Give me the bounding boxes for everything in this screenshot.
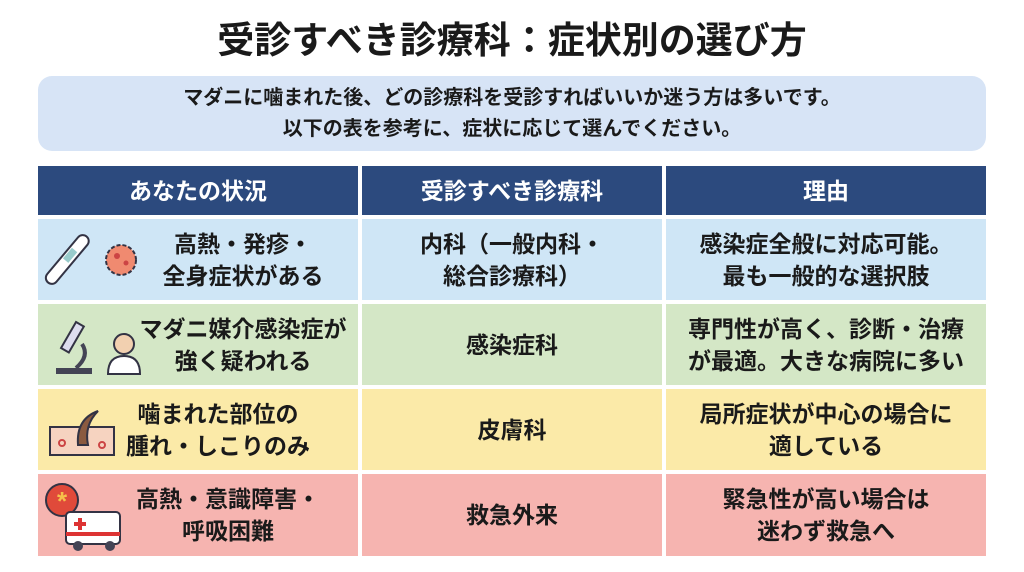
row 2 situation: マダニ媒介感染症が <box>140 316 346 342</box>
header: department: 受診すべき診療科 <box>421 178 603 204</box>
row 1 situation: 高熱・発疹・ <box>174 230 312 256</box>
row 1 department: 内科（一般内科・ <box>420 230 604 256</box>
header: situation <box>38 166 358 215</box>
row 2 situation <box>38 304 358 385</box>
row 3 situation: 噛まれた部位の <box>138 400 298 426</box>
header: department <box>362 166 662 215</box>
row 1 situation: 全身症状がある <box>162 262 324 288</box>
icon: microscope and doctor <box>56 320 141 375</box>
row 4 department: 救急外来 <box>466 502 558 528</box>
row 1 reason <box>666 219 986 300</box>
intro box: 以下の表を参考に、症状に応じて選んでください。 <box>283 118 741 140</box>
row 4 reason: 緊急性が高い場合は <box>722 486 930 512</box>
icon: skin bite <box>49 410 115 456</box>
intro box: マダニに噛まれた後、どの診療科を受診すればいいか迷う方は多いです。 <box>183 86 841 108</box>
row 3 reason: 局所症状が中心の場合に <box>700 400 952 426</box>
row 4 reason <box>666 474 986 556</box>
row 2 reason <box>666 304 986 385</box>
row 4 department <box>362 474 662 556</box>
row 2 reason: が最適。大きな病院に多い <box>688 348 964 374</box>
row 1 reason: 最も一般的な選択肢 <box>722 262 930 288</box>
row 1 department <box>362 219 662 300</box>
icon: thermometer and virus <box>44 234 137 285</box>
header: situation: あなたの状況 <box>129 178 267 204</box>
row 4 situation <box>38 474 358 556</box>
row 3 department: 皮膚科 <box>478 416 546 442</box>
title: 受診すべき診療科：症状別の選び方 <box>217 20 807 61</box>
row 2 department: 感染症科 <box>466 332 558 358</box>
row 1 situation <box>38 219 358 300</box>
row 2 situation: 強く疑われる <box>175 348 311 374</box>
intro box <box>38 76 986 151</box>
row 3 situation <box>38 389 358 470</box>
row 3 situation: 腫れ・しこりのみ <box>126 432 310 458</box>
row 2 department <box>362 304 662 385</box>
icon: ambulance <box>45 483 121 551</box>
row 4 situation: 高熱・意識障害・ <box>136 486 320 512</box>
row 3 reason: 適している <box>769 432 883 458</box>
header: reason <box>666 166 986 215</box>
row 3 reason <box>666 389 986 470</box>
row 3 department <box>362 389 662 470</box>
row 1 reason: 感染症全般に対応可能。 <box>700 230 952 256</box>
row 4 reason: 迷わず救急へ <box>757 518 895 544</box>
row 4 situation: 呼吸困難 <box>182 518 274 544</box>
icon: ambulance: * <box>57 486 68 516</box>
row 2 reason: 専門性が高く、診断・治療 <box>688 316 964 342</box>
header: reason: 理由 <box>803 178 849 204</box>
row 1 department: 総合診療科） <box>443 262 581 288</box>
